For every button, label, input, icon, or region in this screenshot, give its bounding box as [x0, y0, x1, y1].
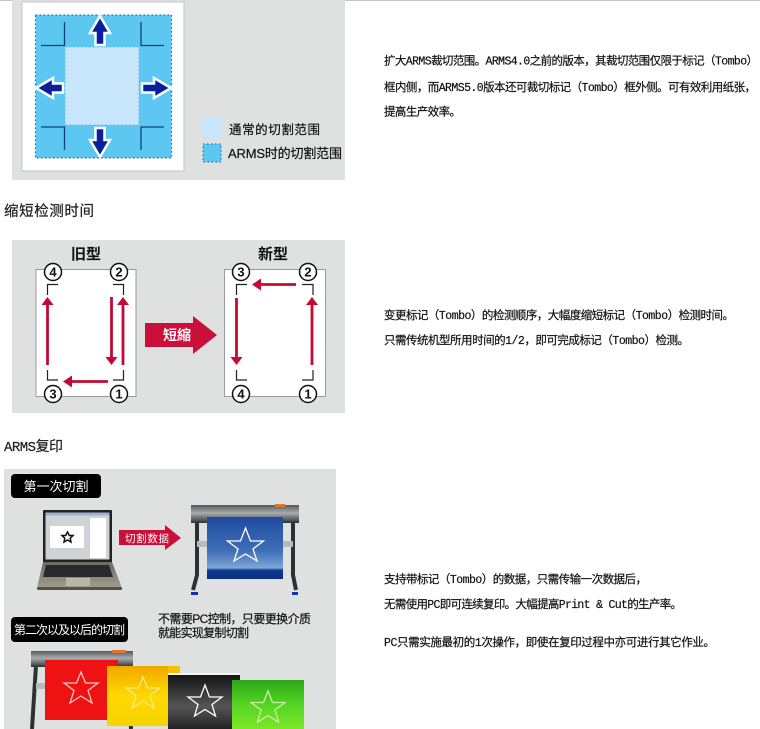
note: no PC needed: [158, 612, 311, 640]
panel: cutting range diagram: [12, 0, 345, 180]
text block: copy description: [384, 572, 715, 650]
sheet: new model: [224, 264, 326, 402]
heading: shorten detection time: 缩短检测时间: [4, 203, 94, 220]
arrow: shortened: 短縮: [163, 327, 191, 343]
icon: arrow up: [90, 16, 110, 45]
text block: detection description: [384, 308, 734, 348]
text block: cutting range description: 提高生产效率。: [384, 104, 461, 120]
icon: arrow right: [142, 78, 171, 98]
sheet: old model: 1: [115, 386, 123, 402]
arrow: shortened: [145, 316, 217, 354]
sheet: old model: 2: [115, 264, 123, 280]
top edge line: [0, 0, 760, 1]
note: no PC needed: 不需要PC控制，只要更换介质: [158, 612, 311, 626]
text block: copy description: 支持带标记（Tombo）的数据，只需传输一次数据后，: [384, 572, 647, 587]
icon: arrow down: [90, 128, 110, 157]
crop marks: [41, 22, 164, 150]
legend: normal range: [202, 118, 320, 137]
sheet: new model: 3: [237, 264, 245, 280]
label: first cut: [11, 474, 101, 498]
legend: normal range: 通常的切割范围: [229, 122, 320, 137]
panel: ARMS copy diagram: [4, 469, 336, 729]
sheet: old model: 3: [49, 386, 57, 402]
legend: ARMS range: [203, 144, 342, 162]
sheet: old model: [36, 264, 136, 402]
text block: cutting range description: [384, 54, 758, 120]
normal cutting area: [65, 47, 139, 125]
note: no PC needed: 就能实现复制切割: [158, 625, 249, 640]
text block: copy description: 无需使用PC即可连续复印。大幅提高Print & Cut的生产率。: [384, 597, 682, 612]
white card: [22, 2, 184, 171]
media: red: [45, 660, 118, 720]
sheet: new model: 4: [237, 386, 245, 402]
sheet: new model: 2: [304, 264, 312, 280]
label: old model: 旧型: [71, 246, 101, 263]
text block: cutting range description: 框内侧，而ARMS5.0版本还可裁切标记（Tombo）框外侧。可有效利用纸张，: [384, 80, 756, 95]
label: second and later cuts: 第二次以及以后的切割: [14, 622, 125, 637]
text block: detection description: 变更标记（Tombo）的检测顺序，大幅度缩短标记（Tombo）检测时间。: [384, 308, 734, 323]
label: second and later cuts: [11, 617, 128, 642]
icon: plotter with blue media: [191, 504, 299, 595]
text block: copy description: PC只需实施最初的1次操作，即使在复印过程中亦可进行其它作业。: [384, 635, 715, 650]
label: first cut: 第一次切割: [24, 479, 88, 494]
panel: detection time diagram: [12, 240, 345, 413]
media: yellow: [107, 666, 180, 726]
heading: ARMS copy: ARMS复印: [4, 438, 63, 456]
arrow: cut data: [119, 525, 181, 550]
icon: laptop: [37, 510, 122, 590]
legend: ARMS range: ARMS时的切割范围: [228, 146, 342, 161]
label: new model: 新型: [258, 245, 288, 263]
arrow: cut data: 切割数据: [125, 532, 170, 545]
icon: plotter with color media: [31, 650, 133, 729]
sheet: new model: 1: [304, 386, 312, 402]
sheet: old model: 4: [49, 264, 57, 280]
text block: detection description: 只需传统机型所用时间的1/2，即可完成标记（Tombo）检测。: [384, 333, 689, 348]
media: green: [232, 680, 304, 729]
text block: cutting range description: 扩大ARMS裁切范围。ARMS4.0之前的版本，其裁切范围仅限于标记（Tombo）: [384, 54, 758, 68]
ARMS cutting area: [36, 15, 172, 158]
icon: arrow left: [36, 78, 63, 98]
media: black: [168, 673, 240, 729]
